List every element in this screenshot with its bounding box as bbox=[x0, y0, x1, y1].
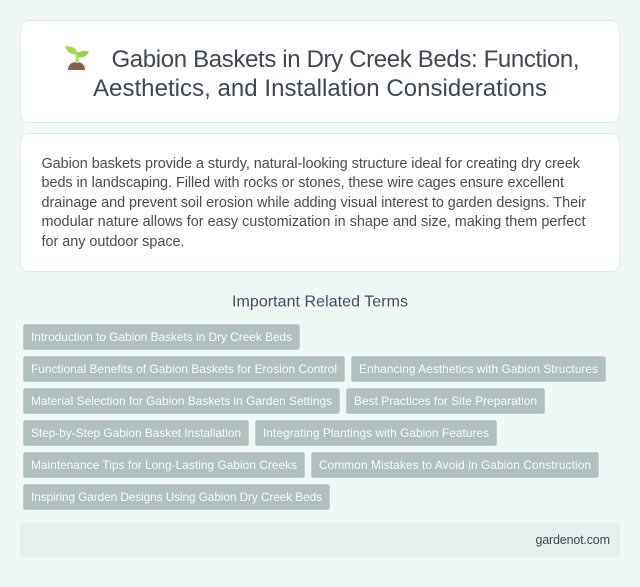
tag bbox=[346, 388, 544, 414]
tag bbox=[24, 420, 248, 446]
tag: Common Mistakes to Avoid in Gabion Construction bbox=[319, 458, 591, 472]
tag: Step-by-Step Gabion Basket Installation bbox=[31, 426, 241, 440]
heading: related terms: Important Related Terms bbox=[232, 294, 408, 310]
tag: Integrating Plantings with Gabion Features bbox=[263, 426, 489, 440]
tag bbox=[352, 356, 606, 382]
tag: Material Selection for Gabion Baskets in Garden Settings bbox=[31, 394, 332, 408]
tag bbox=[24, 388, 340, 414]
panel: related term tags bbox=[24, 324, 606, 510]
footer site name: gardenot.com bbox=[536, 533, 610, 547]
tag: Inspiring Garden Designs Using Gabion Dry Creek Beds bbox=[31, 490, 322, 504]
tag: Best Practices for Site Preparation bbox=[354, 394, 537, 408]
description text bbox=[42, 156, 586, 250]
description text: modular nature allows for easy customization in shape and size, making them perfect bbox=[42, 214, 586, 230]
icon: sprout bbox=[65, 46, 89, 70]
title: Gabion Baskets in Dry Creek Beds: Function, bbox=[112, 46, 580, 73]
title bbox=[93, 46, 580, 102]
description text: beds in landscaping. Filled with rocks or stones, these wire cages ensure excellent bbox=[42, 175, 564, 191]
tag bbox=[24, 356, 344, 382]
tag: Maintenance Tips for Long-Lasting Gabion Creeks bbox=[31, 458, 297, 472]
tag: Introduction to Gabion Baskets in Dry Creek Beds bbox=[31, 330, 292, 344]
tag bbox=[24, 484, 330, 510]
title: Aesthetics, and Installation Considerations bbox=[93, 75, 547, 102]
tag: Enhancing Aesthetics with Gabion Structures bbox=[359, 362, 598, 376]
description text: drainage and prevent soil erosion while adding visual interest to garden designs. Their bbox=[42, 195, 586, 211]
footer bbox=[20, 523, 620, 557]
panel: title card bbox=[20, 20, 620, 122]
panel: description card bbox=[20, 134, 620, 272]
tag bbox=[24, 452, 304, 478]
tag bbox=[256, 420, 496, 446]
description text: for any outdoor space. bbox=[42, 234, 184, 250]
tag bbox=[24, 324, 300, 350]
tag: Functional Benefits of Gabion Baskets for Erosion Control bbox=[31, 362, 337, 376]
description text: Gabion baskets provide a sturdy, natural-looking structure ideal for creating dry creek bbox=[42, 156, 581, 172]
tag bbox=[312, 452, 598, 478]
